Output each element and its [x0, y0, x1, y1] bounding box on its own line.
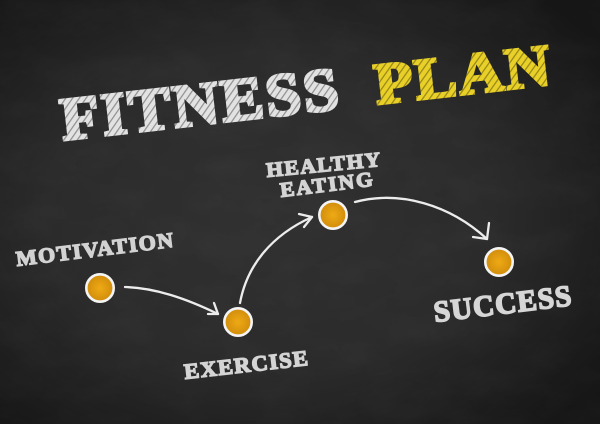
node: motivation [86, 274, 114, 302]
node: success [485, 248, 513, 276]
label: success: SUCCESS [432, 280, 573, 329]
title: FITNESS: FITNESS [57, 56, 342, 154]
arrow: exercise to healthy eating [240, 214, 312, 303]
label: healthy eating: HEALTHY [265, 147, 381, 182]
node: healthy eating [319, 201, 347, 229]
label: motivation: MOTIVATION [15, 228, 175, 271]
label: healthy eating: EATING [279, 167, 374, 202]
arrow: healthy eating to success [355, 198, 489, 239]
arrow: motivation to exercise [125, 287, 218, 314]
label: healthy eating [265, 147, 381, 202]
title: PLAN: PLAN [371, 33, 553, 117]
label: exercise: EXERCISE [183, 345, 309, 384]
node: exercise [224, 308, 252, 336]
